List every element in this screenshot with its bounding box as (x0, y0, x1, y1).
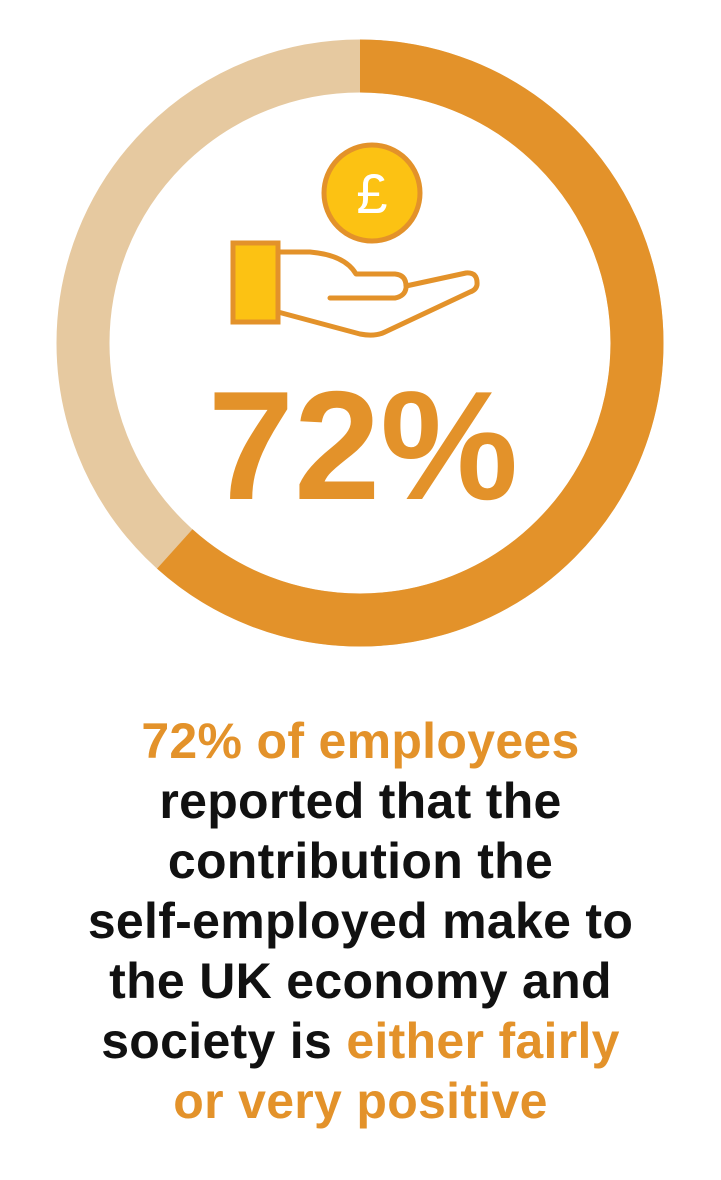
donut background track (83, 66, 637, 620)
caption text: contribution the (168, 833, 553, 889)
caption text: 72% of employees (141, 713, 580, 769)
donut chart with icon and value (56, 40, 664, 646)
caption text: the UK economy and (109, 953, 612, 1009)
caption text: society is either fairly (101, 1013, 620, 1069)
big value 72%: 72% (208, 359, 518, 532)
caption text: reported that the (159, 773, 562, 829)
donut value arc (83, 66, 637, 620)
caption text: self-employed make to (88, 893, 633, 949)
icon: hand with pound coin: £ (356, 162, 388, 225)
caption text (88, 713, 633, 1129)
caption text: or very positive (173, 1073, 548, 1129)
icon: hand with pound coin (233, 145, 477, 335)
